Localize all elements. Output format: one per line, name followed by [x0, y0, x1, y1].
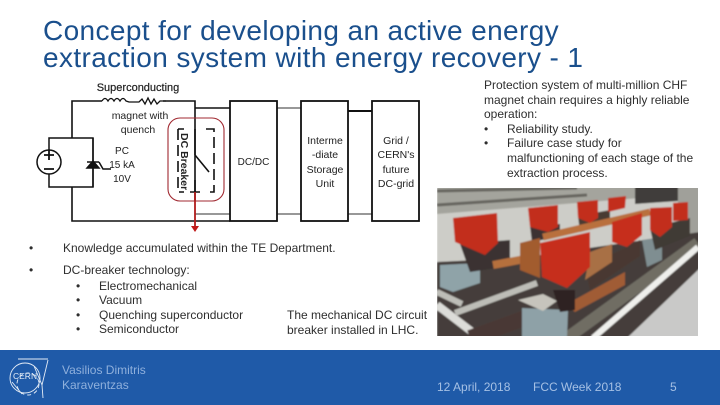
grid block: CERN's [377, 149, 415, 161]
presenter name: Karaventzas [62, 378, 129, 392]
text: protection system: operation: [484, 107, 537, 121]
text: technology list: • [76, 322, 80, 336]
date: 12 April, 2018 [437, 380, 510, 394]
text: protection system: Reliability study. [507, 122, 593, 136]
label: magnet with quench: magnet with [112, 110, 168, 122]
grid block: DC-grid [378, 178, 414, 190]
grid block: Grid / [383, 135, 409, 147]
text: protection system: extraction process. [507, 166, 608, 180]
grid block [372, 101, 419, 221]
event: FCC Week 2018 [533, 380, 621, 394]
power converter [37, 138, 111, 187]
label: PC: 10V [113, 174, 131, 185]
circuit diagram [36, 82, 420, 232]
label: PC [109, 146, 135, 185]
text: technology list [29, 263, 243, 336]
text: technology list: • [76, 279, 80, 293]
storage block: -diate [312, 149, 338, 161]
arrow: extraction [191, 192, 199, 232]
circuit diagram: quench [121, 124, 155, 136]
photo: mechanical DC circuit breaker [437, 188, 698, 336]
storage block: Unit [316, 178, 334, 190]
grid block: future [383, 164, 410, 176]
text: protection system: Protection system of multi-million CHF [484, 78, 687, 92]
photo caption: breaker installed in LHC. [287, 323, 418, 337]
text: protection system: malfunctioning of each stage of the [507, 151, 693, 165]
icon: CERN logo: CERN [13, 371, 37, 381]
storage block: Storage [307, 164, 344, 176]
text: technology list: Quenching superconductor [99, 308, 243, 322]
text: protection system: magnet chain requires a highly reliable [484, 93, 689, 107]
text: technology list: DC-breaker technology: [63, 263, 190, 277]
label: PC: PC [115, 146, 129, 157]
text: technology list: • [76, 293, 80, 307]
text: technology list: • [29, 263, 33, 277]
text: protection system [484, 78, 693, 180]
label: superconducting: Superconducting [97, 82, 179, 94]
text: technology list: Electromechanical [99, 279, 197, 293]
storage block: Interme [307, 135, 343, 147]
wires [72, 101, 372, 221]
machinery shadows [460, 240, 510, 272]
text: protection system: Failure case study for [507, 136, 622, 150]
storage block [301, 101, 348, 221]
text: technology list: Vacuum [99, 293, 142, 307]
text: knowledge bullet: • [29, 241, 33, 255]
text: knowledge bullet: Knowledge accumulated within the TE Department. [63, 241, 336, 255]
DC breaker highlight [168, 118, 224, 201]
title: extraction system with energy recovery - 1 [43, 42, 583, 73]
title: Concept for developing an active energy [43, 15, 559, 46]
footer band [0, 350, 720, 405]
text: technology list: Semiconductor [99, 322, 179, 336]
DC/DC block [230, 101, 277, 221]
label: PC: 15 kA [109, 160, 135, 171]
DC breaker dashed box [178, 129, 214, 192]
DC/DC block: DC/DC [238, 157, 269, 168]
label: DC Breaker: DC Breaker [178, 133, 190, 190]
presenter name [62, 363, 146, 392]
text: protection system: • [484, 136, 488, 150]
icon: CERN logo [10, 358, 48, 398]
text: protection system: • [484, 122, 488, 136]
photo caption: The mechanical DC circuit [287, 308, 427, 322]
text: technology list: • [76, 308, 80, 322]
presenter name: Vasilios Dimitris [62, 363, 146, 377]
title [43, 15, 583, 73]
page number: 5 [670, 380, 677, 394]
icon: magnet coil and resistor [102, 98, 166, 104]
photo caption [287, 308, 427, 337]
